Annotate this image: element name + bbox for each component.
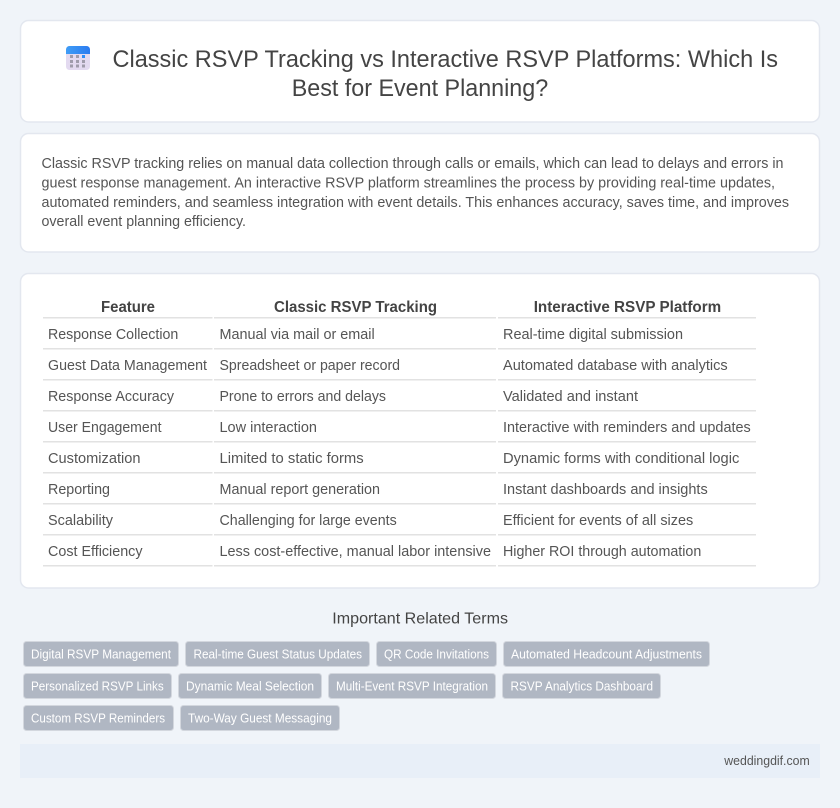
row: customization xyxy=(48,451,739,467)
row: customization: Dynamic forms with conditional logic xyxy=(503,451,739,467)
tag: QR Code Invitations xyxy=(384,647,489,661)
row: reporting: Reporting xyxy=(48,482,110,498)
row: response accuracy: Prone to errors and delays xyxy=(220,389,386,405)
row: scalability: Challenging for large events xyxy=(220,513,397,529)
tag: Custom RSVP Reminders xyxy=(31,711,165,725)
panel: summary paragraph xyxy=(20,134,820,252)
row: guest data management xyxy=(48,358,728,374)
row: scalability: Scalability xyxy=(48,513,114,529)
title: Classic RSVP Tracking vs Interactive RSVP Platforms: Which Is xyxy=(112,46,778,73)
title: Best for Event Planning? xyxy=(292,75,548,102)
row: response collection: Manual via mail or email xyxy=(220,327,375,343)
row: user engagement: User Engagement xyxy=(48,420,162,436)
summary text xyxy=(42,156,789,230)
row: customization: Customization xyxy=(48,451,140,467)
icon: calendar xyxy=(66,46,90,70)
tag: Digital RSVP Management xyxy=(31,647,171,661)
table header xyxy=(101,299,721,316)
tag: Multi-Event RSVP Integration xyxy=(336,679,488,693)
tag: Personalized RSVP Links xyxy=(31,679,164,693)
row: cost efficiency: Less cost-effective, manual labor intensive xyxy=(220,544,491,560)
row: cost efficiency: Cost Efficiency xyxy=(48,544,143,560)
row: guest data management: Guest Data Management xyxy=(48,358,207,374)
tag xyxy=(186,642,370,666)
footer xyxy=(20,744,820,778)
tag xyxy=(504,642,710,666)
title xyxy=(112,46,778,102)
row: response collection xyxy=(48,327,683,343)
summary text: automated reminders, and seamless integration with event details. This enhances accuracy, saves time, and improves xyxy=(42,195,789,211)
panel: title card xyxy=(20,20,820,122)
row: scalability: Efficient for events of all sizes xyxy=(503,513,693,529)
row: reporting: Manual report generation xyxy=(220,482,380,498)
row: response accuracy xyxy=(48,389,638,405)
row: guest data management: Automated database with analytics xyxy=(503,358,728,374)
row: cost efficiency xyxy=(48,544,701,560)
summary text: Classic RSVP tracking relies on manual data collection through calls or emails, which can lead to delays and errors in xyxy=(42,156,784,172)
row: user engagement xyxy=(48,420,751,436)
tag xyxy=(24,642,178,666)
footer source text: weddingdif.com xyxy=(723,753,810,768)
table header: Interactive RSVP Platform xyxy=(534,299,721,316)
related terms heading: Important Related Terms xyxy=(332,610,508,628)
row: reporting xyxy=(48,482,708,498)
tag: Real-time Guest Status Updates xyxy=(194,647,362,661)
row: response collection: Response Collection xyxy=(48,327,178,343)
tag: RSVP Analytics Dashboard xyxy=(510,679,653,693)
related terms tags xyxy=(24,642,710,730)
table header: Classic RSVP Tracking xyxy=(274,299,437,316)
tag xyxy=(178,674,322,698)
row: response collection: Real-time digital submission xyxy=(503,327,683,343)
row: scalability xyxy=(48,513,693,529)
row: user engagement: Low interaction xyxy=(220,420,317,436)
tag: Dynamic Meal Selection xyxy=(186,679,314,693)
tag xyxy=(376,642,496,666)
tag xyxy=(180,706,340,730)
summary text: guest response management. An interactive RSVP platform streamlines the process by providing real-time updates, xyxy=(42,176,775,192)
summary text: overall event planning efficiency. xyxy=(42,214,246,230)
panel: comparison table xyxy=(20,274,820,588)
row: guest data management: Spreadsheet or paper record xyxy=(220,358,400,374)
tag: Two-Way Guest Messaging xyxy=(188,711,332,725)
tag: Automated Headcount Adjustments xyxy=(511,647,702,661)
table header: Feature xyxy=(101,299,155,316)
row: response accuracy: Response Accuracy xyxy=(48,389,175,405)
tag xyxy=(24,674,172,698)
row: reporting: Instant dashboards and insights xyxy=(503,482,708,498)
row: user engagement: Interactive with reminders and updates xyxy=(503,420,751,436)
row: cost efficiency: Higher ROI through automation xyxy=(503,544,701,560)
tag xyxy=(24,706,174,730)
tag xyxy=(328,674,496,698)
row: customization: Limited to static forms xyxy=(220,451,364,467)
row: response accuracy: Validated and instant xyxy=(503,389,638,405)
tag xyxy=(502,674,660,698)
